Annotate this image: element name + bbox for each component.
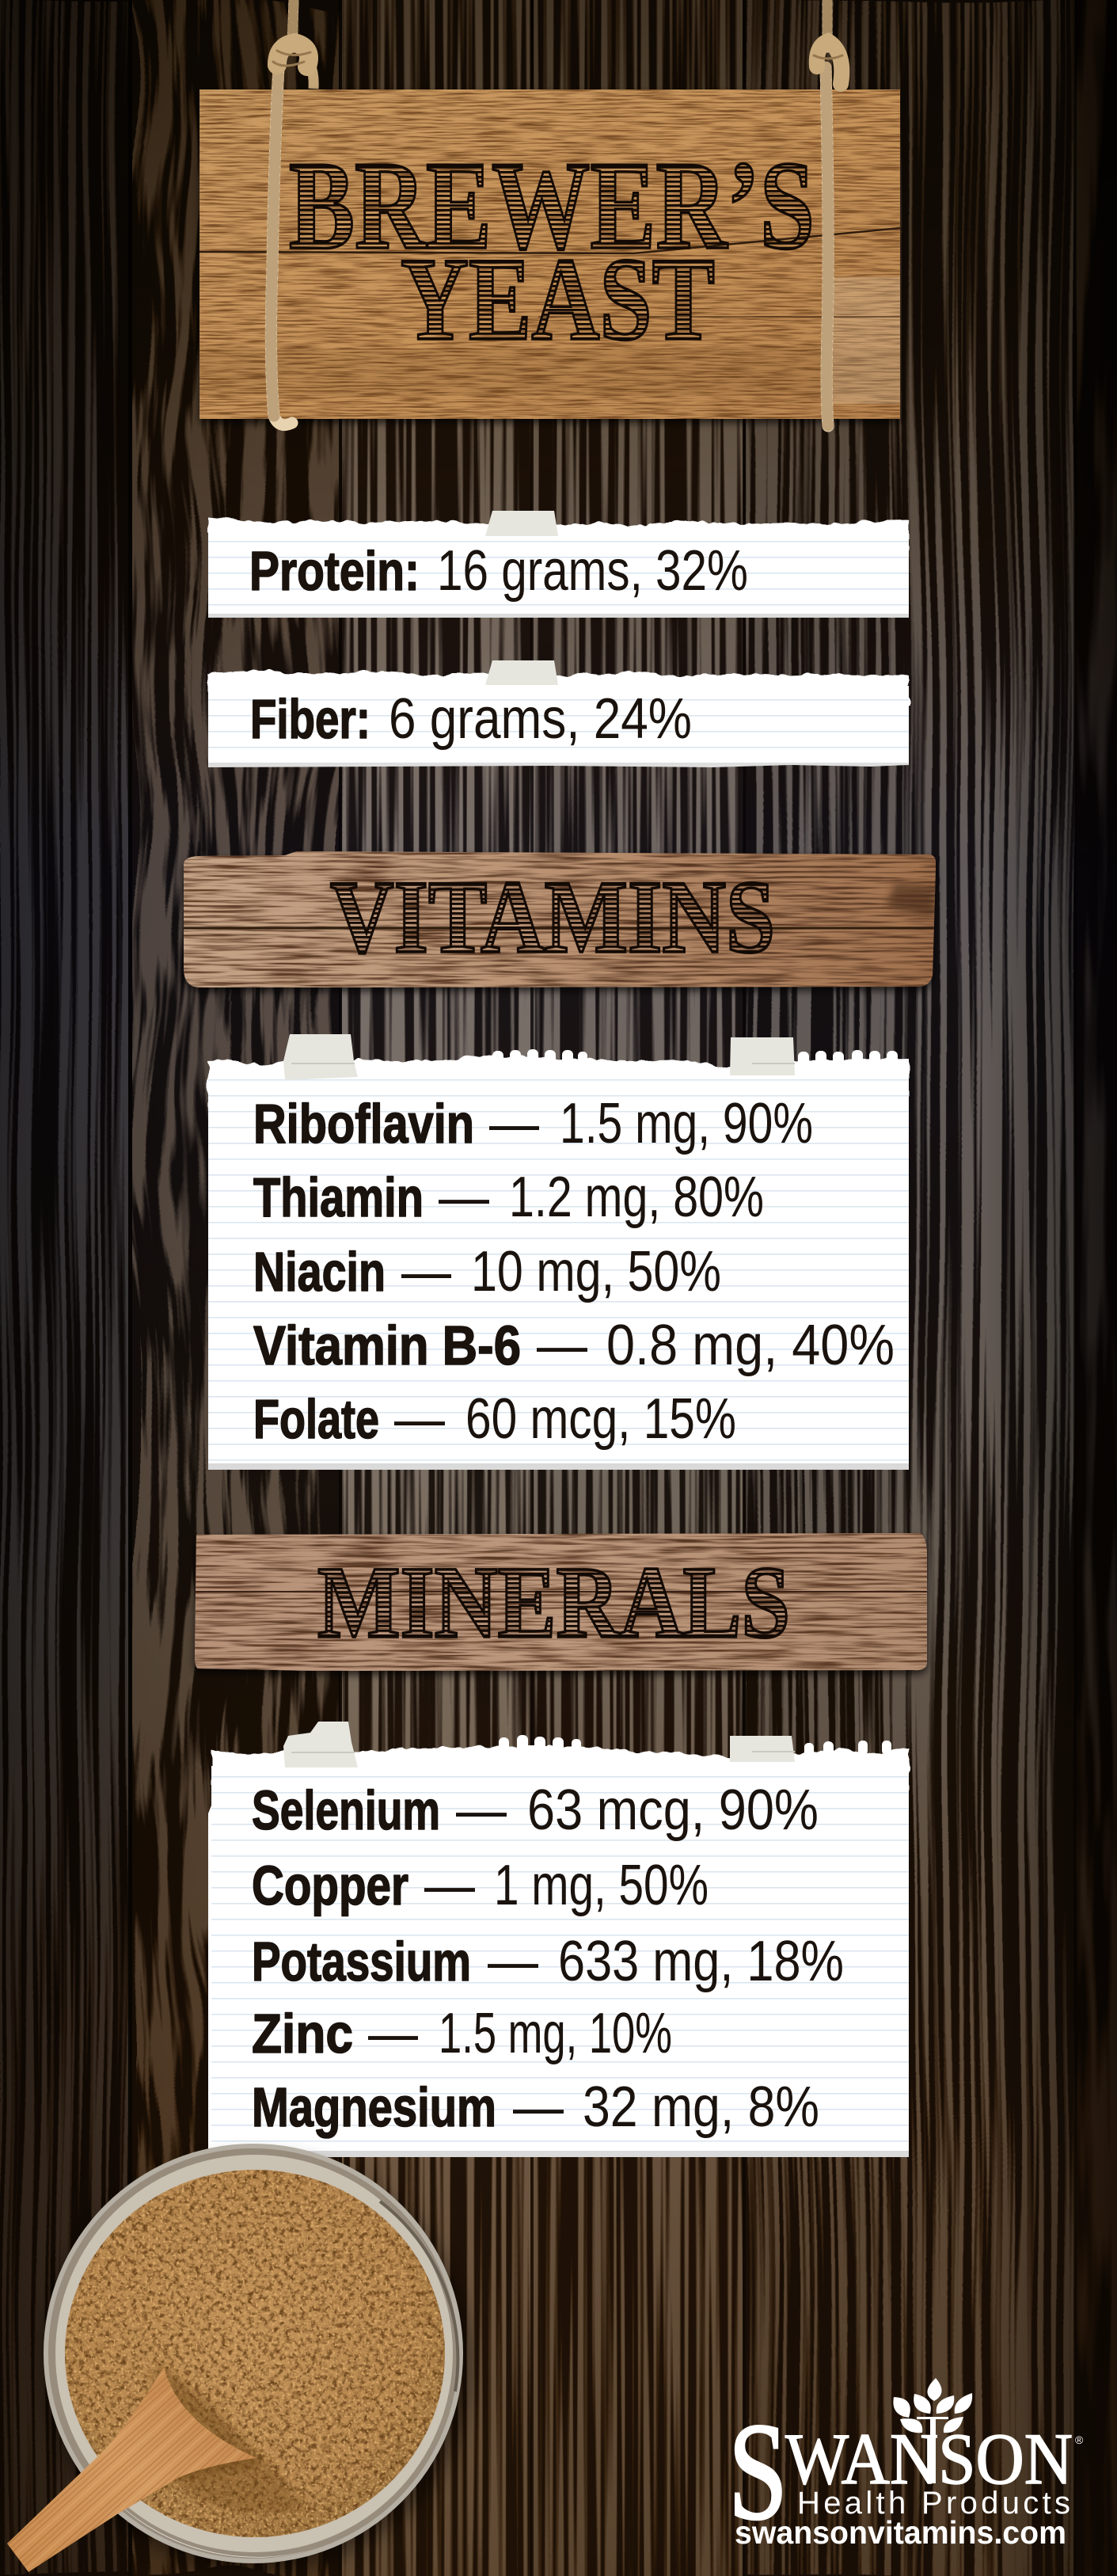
- sign: Brewer's Yeast: [199, 0, 900, 426]
- row: zinc: [252, 2002, 672, 2065]
- row: vitamin B-6: [253, 1314, 895, 1377]
- rope behind sign: left loop: [299, 49, 313, 89]
- row: copper: 1 mg, 50%: [494, 1854, 709, 1917]
- row: vitamin B-6: Vitamin B-6: [253, 1315, 521, 1376]
- note: fiber: [208, 660, 909, 767]
- row: selenium: Selenium: [252, 1779, 440, 1841]
- row: vitamin B-6: —: [537, 1314, 587, 1377]
- row: riboflavin: —: [489, 1092, 539, 1155]
- row: folate: Folate: [253, 1388, 379, 1450]
- bowl of brewer's yeast powder: [7, 2144, 471, 2572]
- row: niacin: Niacin: [253, 1241, 386, 1303]
- text: fiber: 6 grams, 24%: [389, 687, 692, 751]
- row: magnesium: 32 mg, 8%: [583, 2076, 819, 2139]
- hanging sign board: [199, 89, 900, 419]
- torn paper: [208, 516, 909, 618]
- logo: wheat leaves: [893, 2378, 972, 2483]
- row: magnesium: [252, 2076, 819, 2139]
- torn paper: [208, 671, 909, 767]
- powder: [65, 2170, 445, 2537]
- glass bowl rim: [44, 2144, 463, 2563]
- heading: MINERALS: MINERALS: [317, 1546, 790, 1660]
- row: niacin: —: [401, 1240, 451, 1303]
- row: folate: [253, 1387, 736, 1451]
- row: thiamin: 1.2 mg, 80%: [509, 1166, 764, 1229]
- tape: right: [730, 1736, 795, 1762]
- row: potassium: 633 mg, 18%: [558, 1930, 844, 1993]
- row: zinc: —: [368, 2002, 418, 2065]
- note: protein: [208, 511, 909, 618]
- title line: YEAST: YEAST: [401, 234, 715, 365]
- text: protein: Protein:: [249, 540, 420, 602]
- row: riboflavin: Riboflavin: [253, 1093, 474, 1155]
- right rope: [814, 0, 842, 426]
- torn paper: [208, 1735, 909, 2157]
- row: thiamin: [253, 1166, 764, 1229]
- row: copper: [252, 1854, 709, 1917]
- tape: [485, 511, 558, 536]
- plank: [184, 851, 936, 987]
- note: vitamins list: [208, 1034, 909, 1470]
- row: copper: Copper: [252, 1855, 408, 1916]
- row: thiamin: Thiamin: [253, 1166, 424, 1228]
- row: selenium: —: [456, 1779, 507, 1842]
- text: fiber: [250, 687, 692, 751]
- plank: [195, 1533, 927, 1671]
- logo: big S: S: [728, 2395, 788, 2549]
- wooden spoon: [7, 2367, 256, 2572]
- row: zinc: 1.5 mg, 10%: [439, 2002, 672, 2065]
- heading: VITAMINS: VITAMINS: [330, 858, 775, 975]
- row: potassium: —: [488, 1930, 538, 1993]
- text: protein: 16 grams, 32%: [437, 539, 748, 603]
- left rope: [271, 0, 310, 425]
- title line: BREWER'S: BREWER’S: [289, 135, 815, 276]
- tape: left: [283, 1722, 358, 1767]
- sign: Minerals: [195, 1533, 927, 1671]
- row: folate: —: [394, 1387, 445, 1451]
- row: copper: —: [424, 1854, 475, 1917]
- row: riboflavin: 1.5 mg, 90%: [560, 1092, 813, 1155]
- text: protein: [249, 539, 748, 603]
- logo: website: swansonvitamins.com: [735, 2514, 1066, 2551]
- row: niacin: 10 mg, 50%: [471, 1240, 721, 1303]
- logo: Swanson Health Products: [728, 2378, 1084, 2551]
- row: potassium: Potassium: [252, 1931, 471, 1992]
- row: folate: 60 mcg, 15%: [465, 1387, 736, 1451]
- tape: right: [730, 1037, 795, 1075]
- row: riboflavin: [253, 1092, 813, 1155]
- tape: left: [283, 1034, 358, 1080]
- sign: Vitamins: [184, 851, 936, 987]
- row: potassium: [252, 1930, 844, 1993]
- tape: [485, 660, 558, 685]
- row: vitamin B-6: 0.8 mg, 40%: [606, 1314, 895, 1377]
- row: niacin: [253, 1240, 721, 1303]
- row: selenium: 63 mcg, 90%: [527, 1779, 819, 1842]
- text: fiber: Fiber:: [250, 688, 370, 750]
- logo: WANSON: WANSON: [785, 2418, 1073, 2499]
- torn paper: [208, 1049, 909, 1470]
- note: minerals list: [208, 1722, 909, 2157]
- row: magnesium: —: [513, 2076, 564, 2139]
- row: selenium: [252, 1779, 819, 1842]
- row: thiamin: —: [439, 1166, 489, 1229]
- logo: registered mark: ®: [1075, 2433, 1084, 2446]
- row: magnesium: Magnesium: [252, 2076, 496, 2138]
- row: zinc: Zinc: [252, 2003, 353, 2064]
- logo: Health Products: Health Products: [797, 2486, 1070, 2521]
